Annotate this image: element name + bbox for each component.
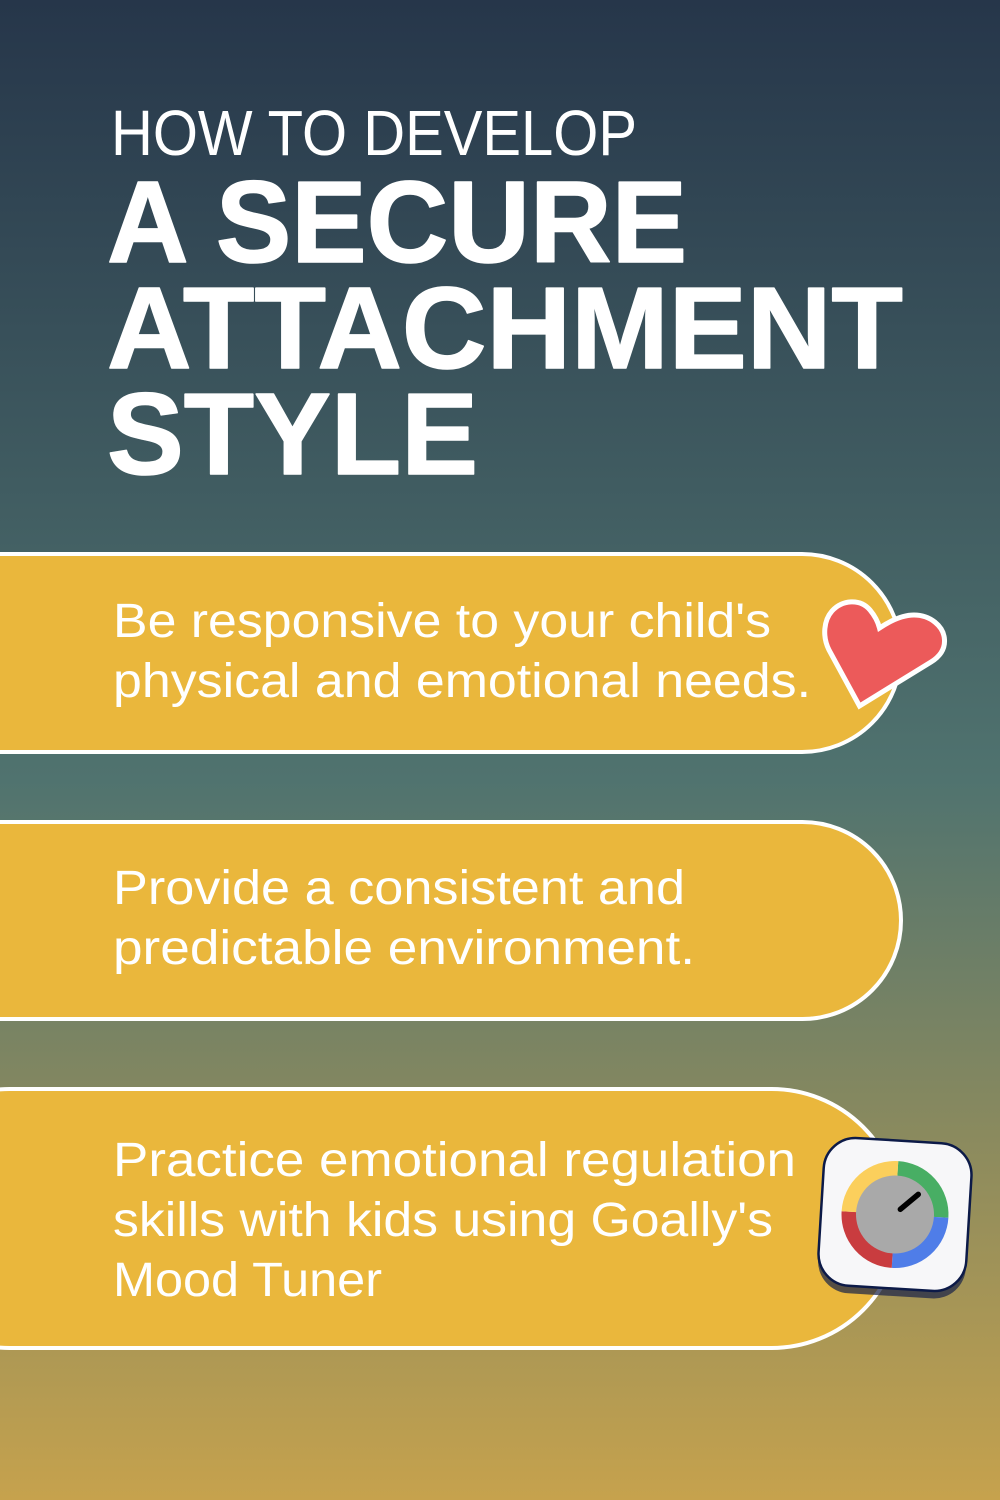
tip text (113, 1134, 796, 1307)
panel: emotional regulation tip (0, 1089, 973, 1348)
pill background (0, 1089, 901, 1348)
pill background (0, 554, 901, 752)
pill background (0, 822, 901, 1019)
dial knob (854, 1173, 936, 1256)
tip text: skills with kids using Goally's (113, 1194, 773, 1247)
title line: attachment: ATTACHMENT (107, 263, 903, 393)
icon: mood tuner dial (816, 1136, 973, 1300)
panel: responsive tip (0, 554, 945, 752)
tip text: predictable environment. (113, 922, 695, 975)
tip text (113, 862, 695, 975)
tip text: Mood Tuner (113, 1254, 382, 1307)
tip text: physical and emotional needs. (113, 655, 811, 708)
title (107, 97, 903, 499)
tip text: Provide a consistent and (113, 862, 685, 915)
panel: consistent environment tip (0, 822, 901, 1019)
title line: a secure: A SECURE (107, 157, 687, 287)
tip text: Practice emotional regulation (113, 1134, 796, 1187)
dial ring (846, 1166, 944, 1263)
icon card (817, 1136, 973, 1293)
tip text: Be responsive to your child's (113, 595, 771, 648)
dial needle (900, 1193, 918, 1210)
icon: heart (825, 602, 945, 706)
title kicker: HOW TO DEVELOP (111, 97, 637, 169)
title line: style: STYLE (107, 369, 478, 499)
tip text (113, 595, 811, 708)
icon shadow (816, 1144, 973, 1300)
